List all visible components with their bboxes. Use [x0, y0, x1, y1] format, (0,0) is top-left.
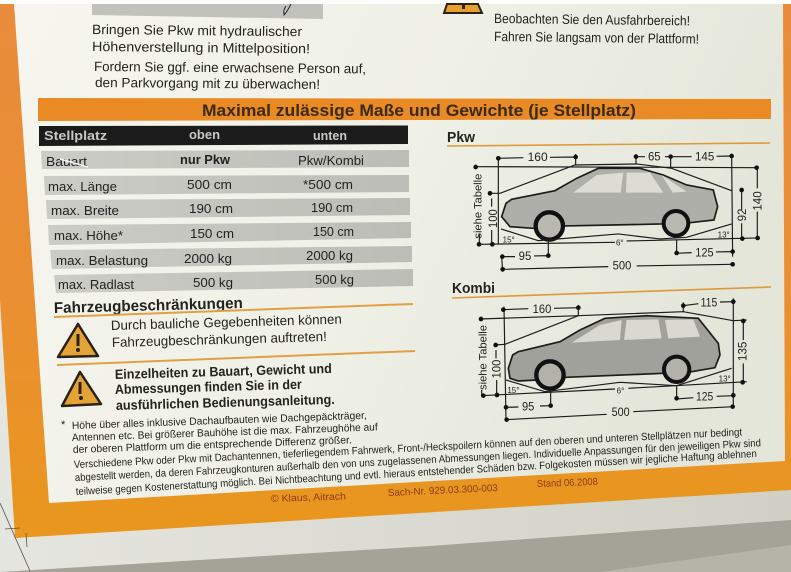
- row: max. Breite: [46, 198, 410, 219]
- Kombi dimension labels: 135: [737, 342, 750, 361]
- Pkw clearance outline and dimension lines: [475, 154, 758, 272]
- heading: Pkw: Pkw: [447, 130, 476, 146]
- Pkw dimension end dots: [473, 154, 760, 272]
- Kombi dimension labels: 6°: [617, 387, 624, 396]
- footnote: vehicle notice: Verschiedene Pkw oder Pkw mit Dachantennen, tieferliegendem Fahrwerk, Front-/Heckspoilern können auf den oberen und unteren Stellplätzen nur bedingt: [74, 426, 742, 471]
- row: max. Länge: max. Länge: [48, 179, 117, 194]
- Pkw dimension labels: 15°: [503, 236, 515, 245]
- row: max. Radlast: max. Radlast: [58, 277, 134, 292]
- Kombi dimension labels: 160: [533, 303, 552, 316]
- row: max. Länge: 500 cm: [187, 177, 232, 192]
- row: max. Höhe: max. Höhe*: [54, 228, 123, 243]
- Kombi dimension labels: 500: [612, 406, 630, 419]
- row: max. Radlast: 500 kg: [193, 275, 233, 290]
- Pkw dimension labels: 140: [751, 191, 764, 211]
- Kombi dimension labels: 15°: [507, 386, 519, 395]
- Pkw dimension labels: siehe Tabelle: [473, 174, 485, 239]
- Kombi dimension labels: 13°: [719, 374, 731, 383]
- instruction text left: Höhenverstellung in Mittelposition!: [92, 39, 310, 56]
- Pkw dimension labels: 95: [519, 250, 531, 263]
- Pkw dimension labels: 6°: [616, 239, 624, 248]
- row: max. Belastung: max. Belastung: [56, 253, 148, 268]
- heading: Kombi: Kombi: [452, 281, 495, 297]
- heading: Fahrzeugbeschränkungen: [54, 295, 413, 317]
- row: max. Radlast: 500 kg: [315, 272, 354, 287]
- instruction text left: Bringen Sie Pkw mit hydraulischer: [92, 22, 303, 39]
- restriction text 1: Durch bauliche Gegebenheiten können: [111, 312, 342, 333]
- Pkw dimension labels: 92: [736, 209, 749, 221]
- warning icon top right: [444, 4, 482, 13]
- instruction text left: Fordern Sie ggf. eine erwachsene Person auf,: [94, 59, 366, 76]
- row: max. Belastung: 2000 kg: [306, 248, 353, 263]
- row: Bauart: Pkw/Kombi: [298, 153, 364, 168]
- row: Bauart: nur Pkw: [180, 152, 231, 167]
- Pkw dimension labels: 65: [648, 151, 661, 164]
- table header row: oben: [189, 128, 220, 142]
- table header row: [39, 126, 408, 146]
- footer imprint: Sach-Nr. 929.03.300-003: [388, 483, 498, 499]
- row: max. Radlast: [54, 269, 413, 293]
- Kombi dimension labels: 115: [701, 297, 717, 310]
- instruction text right: [494, 11, 699, 47]
- dimensions table: [39, 126, 413, 293]
- Kombi dimension labels: 95: [522, 400, 534, 413]
- Pkw dimension labels: 13°: [718, 230, 730, 239]
- top white strip: [0, 0, 791, 4]
- Pkw car silhouette: [502, 168, 718, 240]
- Kombi car silhouette: [508, 316, 720, 389]
- orange divider: [57, 351, 415, 365]
- footer imprint: [271, 477, 598, 505]
- restriction text 1: [111, 312, 342, 350]
- warning icon 1: [58, 324, 98, 357]
- Pkw dimension labels: 160: [528, 151, 548, 164]
- Kombi dimension labels: 125: [696, 391, 713, 404]
- row: max. Höhe: 150 cm: [313, 224, 354, 239]
- restriction text 1: Fahrzeugbeschränkungen auftreten!: [112, 329, 327, 350]
- diagram: Pkw dimensions: [473, 150, 764, 272]
- heading: Fahrzeugbeschränkungen: Fahrzeugbeschränkungen: [54, 295, 243, 317]
- crop marks: [0, 503, 30, 571]
- footnote: height: Höhe über alles inklusive Dachaufbauten wie Dachgepäckträger,: [72, 410, 367, 432]
- Pkw dimension labels: 100: [487, 209, 500, 228]
- Kombi dimension end dots: [479, 299, 746, 422]
- Kombi dimension labels: 100: [491, 359, 504, 378]
- row: Bauart: [41, 150, 409, 169]
- footer imprint: © Klaus, Aitrach: [271, 491, 346, 505]
- Kombi clearance outline and dimension lines: [480, 298, 747, 420]
- instruction text right: Fahren Sie langsam von der Plattform!: [494, 29, 699, 47]
- row: max. Belastung: [50, 246, 412, 269]
- row: max. Länge: [44, 175, 409, 195]
- footnote: height: Antennen etc. Bei größerer Bauhöhe ist die max. Fahrzeughöhe auf: [72, 421, 378, 444]
- Pkw dimension labels: 145: [695, 150, 714, 163]
- Pkw dimension labels: 500: [613, 259, 632, 272]
- restriction text 2: Abmessungen finden Sie in der: [115, 377, 303, 397]
- footnote: height: *: [61, 419, 66, 431]
- row: max. Höhe: 150 cm: [190, 226, 234, 241]
- Kombi dimension labels: siehe Tabelle: [478, 325, 490, 390]
- row: max. Länge: *500 cm: [303, 177, 353, 192]
- restriction text 2: Einzelheiten zu Bauart, Gewicht und: [115, 361, 332, 382]
- footnote: height: [61, 410, 378, 456]
- row: max. Höhe: [48, 222, 411, 245]
- row: max. Breite: 190 cm: [189, 201, 233, 216]
- restriction text 2: ausführlichen Bedienungsanleitung.: [116, 392, 335, 413]
- top gray bar with pen mark: [92, 4, 323, 19]
- instruction text left: [92, 22, 366, 92]
- instruction text right: Beobachten Sie den Ausfahrbereich!: [494, 11, 690, 28]
- row: max. Breite: max. Breite: [51, 203, 119, 218]
- row: max. Belastung: 2000 kg: [184, 251, 232, 266]
- Pkw dimension labels: 125: [695, 246, 714, 259]
- row: Bauart: Bauart: [46, 154, 87, 169]
- footnote: height: der oberen Plattform um die entsprechende Differenz größer.: [73, 434, 352, 456]
- section header band: [38, 98, 771, 121]
- footer imprint: Stand 06.2008: [537, 477, 598, 490]
- section header band: Maximal zulässige Maße und Gewichte (je Stellplatz): [202, 101, 636, 120]
- table header row: Stellplatz: [44, 129, 107, 143]
- warning icon 2: [62, 372, 101, 406]
- heading: Kombi: [452, 281, 771, 298]
- table header row: unten: [313, 129, 347, 143]
- row: max. Breite: 190 cm: [311, 200, 353, 215]
- heading: Pkw: [447, 130, 770, 146]
- Kombi dimension labels: [478, 297, 750, 419]
- instruction text left: den Parkvorgang mit zu überwachen!: [95, 75, 320, 92]
- restriction text 2: [115, 361, 335, 413]
- Pkw dimension labels: [473, 150, 764, 272]
- diagram: Kombi dimensions: [478, 297, 750, 422]
